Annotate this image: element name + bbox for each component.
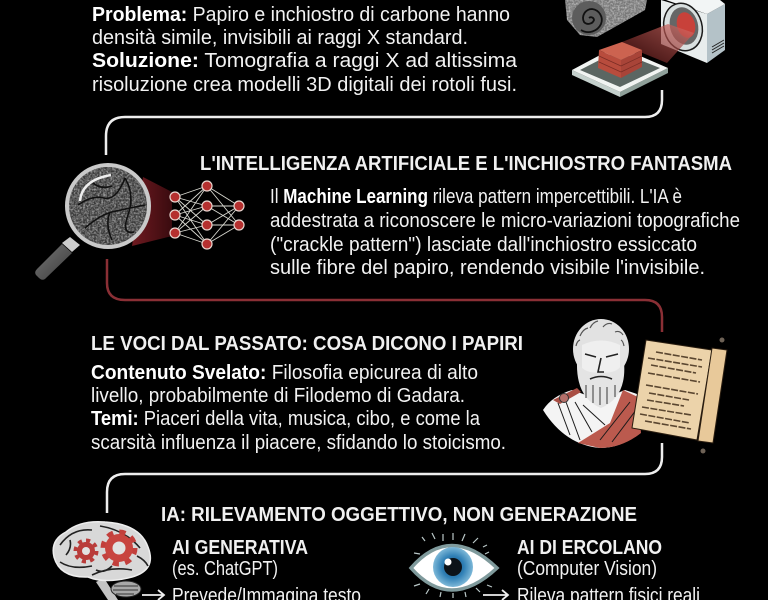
- text block: problem and solution: Problema: Papiro e inchiostro di carbone hanno: [92, 4, 510, 26]
- text block: revealed content and themes: scarsità influenza il piacere, sfidando lo stoicismo.: [91, 432, 506, 454]
- text block: machine learning explanation: sulle fibre del papiro, rendendo visibile l'invisibile.: [270, 257, 705, 279]
- heading: artificial intelligence and phantom ink: L'INTELLIGENZA ARTIFICIALE E L'INCHIOSTRO FANTASMA: [200, 153, 732, 175]
- text block: problem and solution: densità simile, invisibili ai raggi X standard.: [92, 27, 468, 49]
- eye rays: [414, 533, 492, 598]
- text block: problem and solution: Soluzione: Tomografia a raggi X ad altissima: [92, 50, 518, 72]
- text block: machine learning explanation: addestrata a riconoscere le micro-variazioni topografiche: [270, 210, 740, 232]
- magnifier lens: [67, 165, 149, 247]
- neural network: [170, 181, 244, 249]
- icon: carbonized scroll, x-ray scanner and papyrus sample: [565, 0, 725, 97]
- beam to network: [132, 177, 172, 246]
- charred scroll: [565, 0, 647, 37]
- connector: white line from section 3 to section 4: [107, 443, 662, 513]
- text block: revealed content and themes: livello, probabilmente di Filodemo di Gadara.: [91, 385, 465, 407]
- toga and shoulders: [543, 388, 641, 448]
- text block: machine learning explanation: ("crackle pattern") lasciate dall'inchiostro essiccato: [270, 234, 697, 256]
- icon: magnifying glass and neural network: [35, 165, 244, 280]
- text block: Herculaneum AI: [517, 537, 700, 600]
- scanner body: [658, 0, 725, 63]
- text block: revealed content and themes: [91, 362, 506, 454]
- large gear: [103, 532, 135, 564]
- text block: problem and solution: risoluzione crea modelli 3D digitali dei rotoli fusi.: [92, 74, 517, 96]
- arrow: generative AI: [142, 590, 164, 600]
- text block: machine learning explanation: Il Machine Learning rileva pattern impercettibili. L'IA è: [270, 186, 682, 208]
- eye outline: [411, 546, 497, 590]
- text block: generative AI: [172, 537, 361, 600]
- brain stem and cerebellum: [96, 578, 141, 600]
- arrow: Herculaneum AI: [483, 590, 508, 600]
- text block: revealed content and themes: Contenuto Svelato: Filosofia epicurea di alto: [91, 362, 478, 384]
- icon: philosopher bust with papyrus: [543, 319, 727, 454]
- brain outline: [53, 522, 150, 580]
- connector: red line from section 2 to section 3: [107, 259, 662, 332]
- text block: generative AI: (es. ChatGPT): [172, 558, 278, 580]
- iris and pupil: [433, 547, 473, 587]
- papyrus sheet: [632, 338, 727, 454]
- text block: Herculaneum AI: (Computer Vision): [517, 558, 657, 580]
- sample platform: [572, 46, 668, 97]
- small gear: [76, 540, 96, 562]
- heading: voices from the past: LE VOCI DAL PASSATO: COSA DICONO I PAPIRI: [91, 333, 523, 355]
- magnifier handle: [35, 237, 80, 280]
- text block: machine learning explanation: [270, 186, 740, 279]
- text block: generative AI: AI GENERATIVA: [172, 537, 308, 559]
- text block: problem and solution: [92, 4, 518, 96]
- text block: Herculaneum AI: AI DI ERCOLANO: [517, 537, 662, 559]
- icon: eye for computer vision: [411, 533, 497, 598]
- head, hair and beard: [573, 319, 629, 408]
- text block: revealed content and themes: Temi: Piaceri della vita, musica, cibo, e come la: [91, 408, 481, 430]
- papyrus sample cube: [598, 42, 642, 78]
- x-ray beam: [622, 24, 694, 63]
- icon: brain with gears: [53, 522, 150, 600]
- heading: objective detection, not generation: IA: RILEVAMENTO OGGETTIVO, NON GENERAZIONE: [161, 504, 637, 526]
- connector: white line from section 1 to section 2: [106, 90, 662, 155]
